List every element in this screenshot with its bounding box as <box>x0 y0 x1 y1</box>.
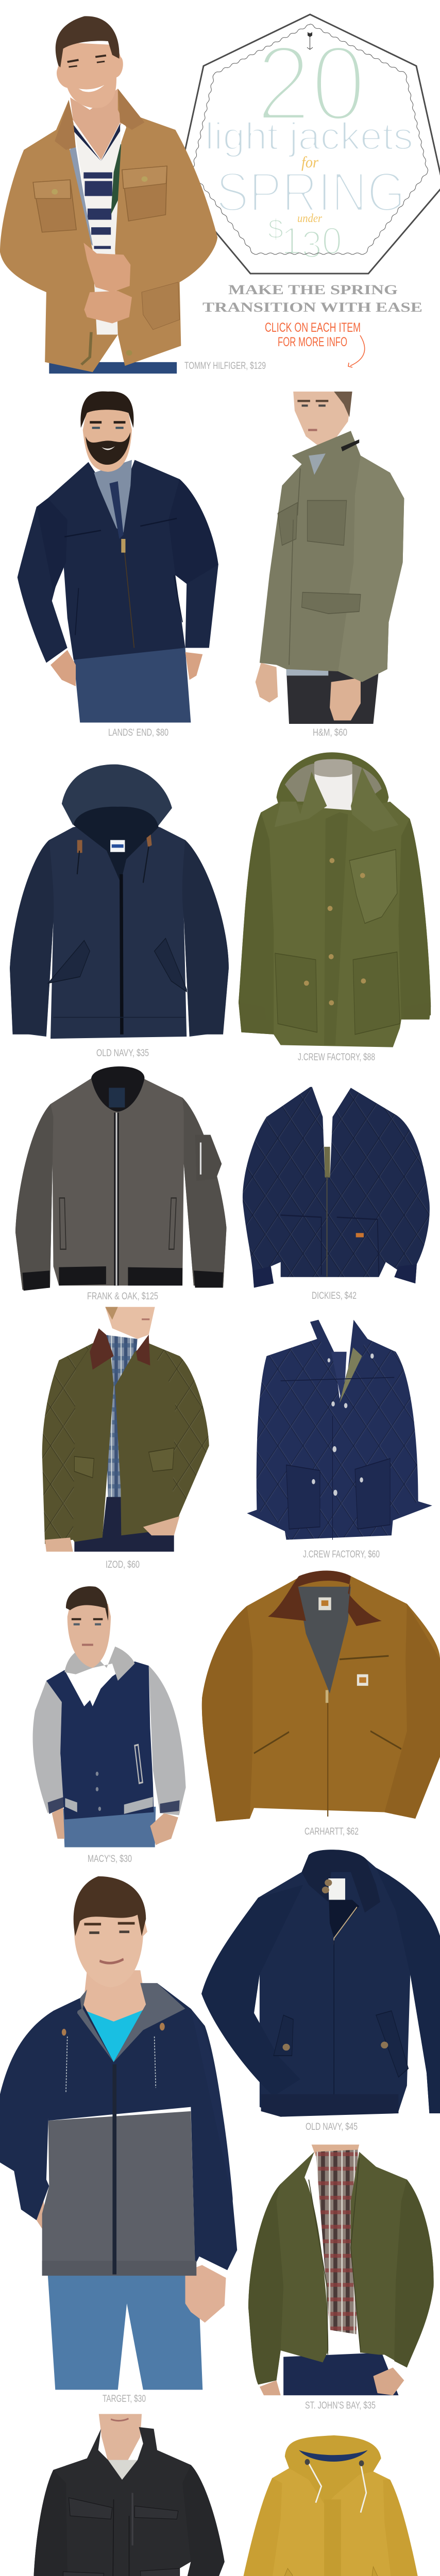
jacket 2: lands end model <box>18 392 218 723</box>
title badge: 20 light jackets for spring under $130 <box>177 14 440 274</box>
jacket 11: carhartt duck jacket <box>202 1570 440 1822</box>
caption: st johns bay $35: ST. JOHN'S BAY, $35 <box>305 2400 376 2411</box>
jacket 15: the north face black field jacket <box>33 2414 225 2576</box>
caption: old navy $45: OLD NAVY, $45 <box>306 2122 358 2132</box>
headline number 20: 20 <box>256 24 366 143</box>
subtitle: make the spring transition with ease: TRANSITION WITH EASE <box>202 300 422 315</box>
jacket 6: frank and oak grey bomber <box>15 1066 227 1291</box>
jacket 1: tommy hilfiger model <box>0 16 217 374</box>
jacket 12: target two tone windbreaker <box>0 1876 237 2389</box>
jacket 5: j crew factory hooded olive <box>239 752 431 1047</box>
caption: dickies $42: DICKIES, $42 <box>312 1291 357 1301</box>
jacket 3: h and m olive field jacket <box>256 392 404 724</box>
subtitle: make the spring transition with ease: MAKE THE SPRING <box>228 282 398 297</box>
heptagon outline <box>177 14 440 274</box>
jacket 16: h and m yellow parka <box>226 2435 432 2576</box>
subtitle: make the spring transition with ease <box>202 282 422 315</box>
callout: click on each item <box>265 320 361 349</box>
price 130: 0 <box>322 219 342 262</box>
caption: tommy hilfiger: TOMMY HILFIGER, $129 <box>184 361 266 371</box>
caption: old navy $35: OLD NAVY, $35 <box>96 1048 149 1059</box>
headline words light jackets: light jackets <box>205 115 413 158</box>
jacket 10: macys varsity hoodie <box>33 1586 186 1848</box>
caption: target $30: TARGET, $30 <box>103 2394 146 2404</box>
arrow: curved orange pointer <box>348 335 365 367</box>
caption: frank and oak $125: FRANK & OAK, $125 <box>87 1291 158 1302</box>
icon: small arrow <box>307 32 313 49</box>
jacket 4: old navy hooded parka <box>10 765 229 1039</box>
jacket 9: j crew factory quilted navy <box>247 1320 432 1540</box>
caption: carhartt $62: CARHARTT, $62 <box>304 1826 359 1837</box>
jacket 13: old navy harrington <box>201 1850 440 2117</box>
price 130: 1 <box>281 219 302 262</box>
script word under: under <box>297 212 323 225</box>
wavy inner border <box>192 24 428 255</box>
caption: lands end: LANDS' END, $80 <box>108 727 168 738</box>
caption: izod $60: IZOD, $60 <box>106 1560 140 1570</box>
jacket 14: st johns bay olive <box>248 2145 434 2395</box>
caption: macys $30: MACY'S, $30 <box>88 1854 132 1865</box>
script word for: for <box>301 153 319 171</box>
caption: j crew factory $60: J.CREW FACTORY, $60 <box>303 1549 380 1560</box>
jacket 7: dickies quilted navy <box>243 1087 430 1287</box>
callout: click on each item: CLICK ON EACH ITEM <box>265 320 361 335</box>
caption: h and m $60: H&M, $60 <box>313 727 347 738</box>
dollar sign: $ <box>268 214 283 245</box>
caption: j crew factory $88: J.CREW FACTORY, $88 <box>298 1052 375 1063</box>
jacket 8: izod quilted olive <box>42 1307 209 1552</box>
price 130: 3 <box>301 223 322 266</box>
headline word SPRING: SPRING <box>216 161 405 224</box>
callout: click on each item: FOR MORE INFO <box>278 335 347 349</box>
